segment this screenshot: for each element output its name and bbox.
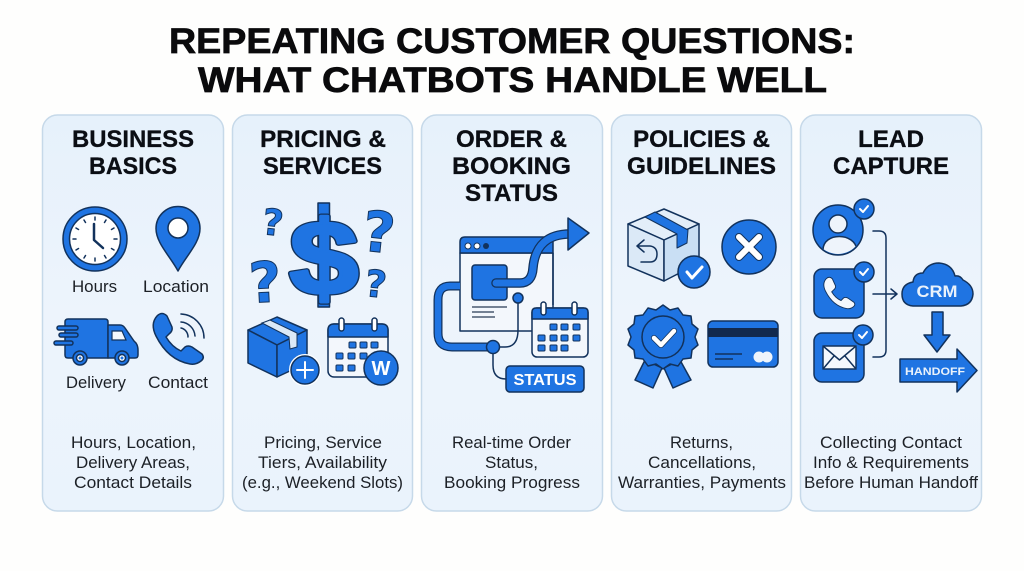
heading: STATUS — [465, 180, 558, 207]
panel background — [232, 115, 412, 511]
title — [169, 22, 855, 100]
label: hours: Hours — [72, 278, 117, 296]
panel: business basics — [42, 115, 224, 511]
icon: dollar and question marks: ? — [363, 262, 389, 307]
icon: CRM cloud: CRM — [916, 282, 958, 301]
title: WHAT CHATBOTS HANDLE WELL — [198, 61, 827, 100]
description: Returns, — [670, 434, 733, 452]
heading: PRICING & — [260, 126, 386, 153]
description: (e.g., Weekend Slots) — [242, 474, 403, 492]
description: Warranties, Payments — [618, 474, 786, 492]
heading — [627, 126, 776, 180]
title: REPEATING CUSTOMER QUESTIONS: — [169, 22, 855, 61]
description: Booking Progress — [444, 474, 580, 492]
description — [444, 434, 580, 492]
description: Cancellations, — [648, 454, 756, 472]
panel background — [800, 115, 982, 511]
icon: dollar and question marks: ? — [359, 199, 398, 268]
panel background — [422, 115, 602, 511]
description: Status, — [485, 454, 538, 472]
description: Delivery Areas, — [76, 454, 190, 472]
label: delivery: Delivery — [66, 374, 127, 392]
heading — [833, 126, 949, 180]
description: Hours, Location, — [71, 434, 196, 452]
arrow: down — [924, 312, 950, 352]
description — [242, 434, 403, 492]
icon: CRM cloud — [902, 263, 973, 306]
icon: calendar with W — [328, 318, 398, 385]
icon: order tracking diagram — [438, 218, 589, 392]
heading: SERVICES — [263, 153, 382, 180]
bracket connector arrow — [873, 231, 897, 357]
icon: clock — [63, 207, 127, 271]
arrow: handoff — [900, 349, 977, 392]
panel: lead capture — [800, 115, 982, 511]
infographic — [42, 28, 982, 512]
description — [804, 434, 978, 492]
arrow: handoff: HANDOFF — [905, 366, 965, 378]
description: Real-time Order — [452, 434, 571, 452]
icon: location pin — [156, 207, 200, 271]
description: Pricing, Service — [264, 434, 382, 452]
heading: CAPTURE — [833, 153, 949, 180]
icon: dollar and question marks: $ — [290, 200, 358, 317]
description — [71, 434, 196, 492]
description: Contact Details — [74, 474, 192, 492]
icon: warranty badge — [628, 305, 698, 388]
description: Tiers, Availability — [258, 454, 388, 472]
heading — [72, 126, 194, 180]
icon: order tracking diagram: STATUS — [514, 372, 576, 389]
icon: delivery truck — [54, 319, 138, 365]
description: Before Human Handoff — [804, 474, 978, 492]
panel background — [42, 115, 224, 511]
heading: POLICIES & — [633, 126, 770, 153]
label: location: Location — [143, 278, 209, 296]
icon: dollar and question marks: $ — [290, 200, 358, 317]
icon: dollar and question marks — [247, 199, 398, 317]
icon: contact person — [813, 199, 874, 258]
heading: LEAD — [858, 126, 924, 153]
icon: phone contact — [814, 262, 874, 318]
heading — [452, 126, 571, 207]
icon: return box with check — [628, 209, 710, 288]
icon: dollar and question marks: ? — [260, 202, 285, 245]
heading: BOOKING — [452, 153, 571, 180]
panel: policies and guidelines — [612, 115, 792, 511]
icon: credit card — [708, 321, 778, 367]
icon: calendar with W: W — [372, 358, 391, 380]
label: contact: Contact — [148, 374, 208, 392]
panel background — [612, 115, 792, 511]
heading: ORDER & — [456, 126, 567, 153]
description — [618, 434, 786, 492]
description: Collecting Contact — [820, 434, 962, 452]
icon: dollar and question marks: ? — [247, 250, 283, 317]
icon: phone — [153, 314, 204, 364]
heading — [260, 126, 386, 180]
icon: box with plus — [248, 317, 320, 385]
heading: BUSINESS — [72, 126, 194, 153]
panel: order and booking status — [422, 115, 602, 511]
panel: pricing and services — [232, 115, 412, 511]
heading: BASICS — [89, 153, 177, 180]
icon: cancel circle — [722, 220, 776, 274]
icon: email contact — [814, 325, 873, 382]
description: Info & Requirements — [813, 454, 969, 472]
heading: GUIDELINES — [627, 153, 776, 180]
